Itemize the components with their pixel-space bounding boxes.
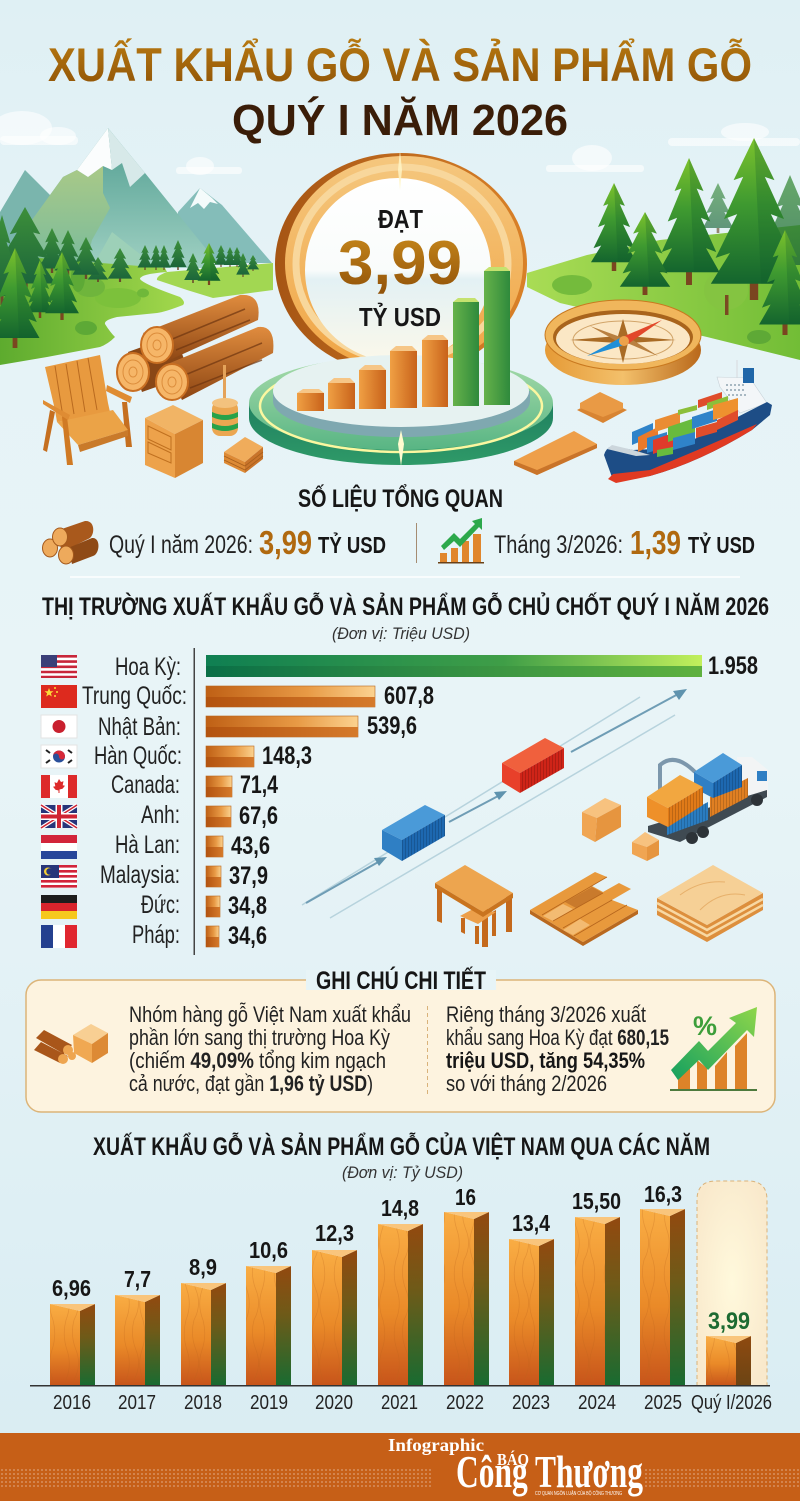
overview divider xyxy=(416,523,417,563)
row: Hàn Quốc: 148,3 xyxy=(262,742,312,770)
section heading: exports by year: (Đơn vị: Tỷ USD) xyxy=(342,1163,463,1182)
total value: 3,99 tỷ USD: 3,99 xyxy=(338,229,462,298)
bar: 2019: 2019 xyxy=(250,1392,288,1414)
total value: 3,99 tỷ USD xyxy=(338,204,462,332)
bar: 2016 xyxy=(50,1275,95,1414)
row: Pháp xyxy=(41,921,267,950)
log pile xyxy=(117,295,273,400)
section heading: key markets: (Đơn vị: Triệu USD) xyxy=(332,624,470,643)
bar: 2023: 2023 xyxy=(512,1392,550,1414)
row: Malaysia xyxy=(41,861,268,890)
footer logo xyxy=(388,1435,643,1497)
container ship xyxy=(604,360,772,483)
row: Đức: Đức: xyxy=(141,891,180,919)
row: Pháp: Pháp: xyxy=(132,921,180,949)
row: Trung Quốc xyxy=(41,682,434,710)
clouds xyxy=(0,111,800,175)
total value: 3,99 tỷ USD: TỶ USD xyxy=(359,302,441,332)
overview item: March: TỶ USD xyxy=(688,530,755,558)
text block: right note: so với tháng 2/2026 xyxy=(446,1071,607,1096)
bar: 2018: 8,9 xyxy=(189,1254,217,1280)
row: Hoa Kỳ: Hoa Kỳ: xyxy=(115,653,181,681)
bar: 2019: 10,6 xyxy=(249,1237,288,1263)
bar: 2022: 16 xyxy=(455,1184,476,1210)
row: Hàn Quốc xyxy=(41,742,312,770)
icon: logs and crate xyxy=(34,1024,108,1064)
footer logo: Công Thương xyxy=(456,1446,643,1497)
row: Pháp: 34,6 xyxy=(228,922,267,950)
central wooden ring xyxy=(275,150,527,375)
overview item: March: Tháng 3/2026: xyxy=(494,531,623,559)
row: Nhật Bản xyxy=(41,712,417,741)
footer logo: CƠ QUAN NGÔN LUẬN CỦA BỘ CÔNG THƯƠNG xyxy=(535,1490,622,1497)
overview item: quarter total: TỶ USD xyxy=(318,530,386,558)
pine forest, right xyxy=(591,138,800,335)
cardboard boxes xyxy=(582,798,659,861)
total value: 3,99 tỷ USD: ĐẠT xyxy=(378,204,423,234)
small planks xyxy=(577,392,627,423)
icon: percent growth arrow: % xyxy=(693,1011,717,1041)
text block: left note: (chiếm 49,09% tổng kim ngạch xyxy=(129,1048,386,1073)
bar: 2024: 15,50 xyxy=(572,1188,621,1214)
row: Đức: 34,8 xyxy=(228,892,267,920)
blue container xyxy=(382,805,445,861)
heading: notes: GHI CHÚ CHI TIẾT xyxy=(316,965,486,995)
row: Anh: 67,6 xyxy=(239,802,278,830)
overview item: March: 1,39 xyxy=(630,524,681,561)
bar: Quý I/2026: Quý I/2026 xyxy=(691,1392,772,1414)
bar: 2018 xyxy=(181,1254,226,1414)
text block: left note: phần lớn sang thị trường Hoa Kỳ xyxy=(129,1025,391,1050)
bar: 2025 xyxy=(640,1181,685,1414)
row: Đức xyxy=(41,891,267,920)
bar: 2025: 2025 xyxy=(644,1392,682,1414)
bar: 2016: 6,96 xyxy=(52,1275,91,1301)
compass xyxy=(545,300,701,385)
row: Anh: Anh: xyxy=(141,801,180,829)
bar: 2018: 2018 xyxy=(184,1392,222,1414)
bar: 2021: 2021 xyxy=(381,1392,418,1414)
title: QUÝ I NĂM 2026 xyxy=(232,95,568,145)
bar: 2017: 7,7 xyxy=(124,1266,151,1292)
row: Malaysia: Malaysia: xyxy=(100,861,180,889)
text block: right note: khẩu sang Hoa Kỳ đạt 680,15 xyxy=(446,1025,669,1050)
row: Nhật Bản: 539,6 xyxy=(367,712,417,740)
wooden spool xyxy=(212,365,238,436)
market list: flags, labels, bars and values xyxy=(41,652,758,950)
row: Canada: Canada: xyxy=(111,771,180,799)
row: Hà Lan: Hà Lan: xyxy=(115,831,180,859)
bar: 2019 xyxy=(246,1237,291,1414)
row: Hà Lan xyxy=(41,831,270,860)
row: Hoa Kỳ xyxy=(41,652,758,681)
text block: right note xyxy=(446,1002,669,1096)
text block: right note: triệu USD, tăng 54,35% xyxy=(446,1048,645,1073)
landscape: mountains, hills, river xyxy=(0,128,800,365)
footer band xyxy=(0,1433,800,1501)
section heading: exports by year xyxy=(93,1131,710,1182)
row: Canada xyxy=(41,771,278,799)
bar: Quý I/2026: 3,99 xyxy=(708,1308,750,1335)
bar: 2023 xyxy=(509,1210,554,1414)
bar: Quý I/2026 xyxy=(691,1308,772,1414)
bar: 2020 xyxy=(312,1220,357,1414)
bar: 2025: 16,3 xyxy=(644,1181,682,1207)
rising wooden bars xyxy=(297,267,510,411)
bar: 2017: 2017 xyxy=(118,1392,156,1414)
row: Malaysia: 37,9 xyxy=(229,862,268,890)
text block: left note: Nhóm hàng gỗ Việt Nam xuất khẩu xyxy=(129,1002,411,1027)
truck with containers xyxy=(647,753,768,844)
row: Anh xyxy=(41,801,278,830)
bar: 2020: 2020 xyxy=(315,1392,353,1414)
trade route arrows xyxy=(302,689,687,918)
text block: right note: Riêng tháng 3/2026 xuất xyxy=(446,1002,647,1027)
icon: growth chart xyxy=(438,518,484,564)
footer logo: BÁO xyxy=(497,1450,529,1469)
row: Hoa Kỳ: 1.958 xyxy=(708,652,758,680)
icon: percent growth arrow xyxy=(670,1007,757,1091)
bar: 2016: 2016 xyxy=(53,1392,91,1414)
bar: 2024: 2024 xyxy=(578,1392,616,1414)
row: Hà Lan: 43,6 xyxy=(231,832,270,860)
bar: 2017 xyxy=(115,1266,160,1414)
red container xyxy=(502,738,564,793)
footer logo: Infographic xyxy=(388,1435,484,1455)
text block: left note: cả nước, đạt gần 1,96 tỷ USD) xyxy=(129,1071,373,1096)
highlight: Q1 2026 column xyxy=(697,1181,767,1386)
section heading: overview: SỐ LIỆU TỔNG QUAN xyxy=(298,483,503,513)
bar: 2022 xyxy=(444,1184,489,1414)
pine forest, left xyxy=(0,207,259,348)
row: Nhật Bản: Nhật Bản: xyxy=(98,713,181,741)
bar: 2022: 2022 xyxy=(446,1392,484,1414)
glass platform xyxy=(249,355,553,466)
text block: left note xyxy=(129,1002,411,1096)
bar: 2021: 14,8 xyxy=(381,1195,419,1221)
overview item: March xyxy=(438,518,755,564)
bar: 2021 xyxy=(378,1195,423,1414)
bar: 2023: 13,4 xyxy=(512,1210,550,1236)
panel: detailed notes xyxy=(26,965,775,1112)
row: Trung Quốc: Trung Quốc: xyxy=(82,682,187,710)
column chart: exports by year xyxy=(30,1181,772,1414)
title xyxy=(48,38,752,145)
wood flooring xyxy=(530,872,638,946)
wooden cabinet xyxy=(145,405,203,478)
row: Canada: 71,4 xyxy=(240,771,278,799)
overview item: quarter total xyxy=(42,521,386,564)
wooden chair xyxy=(43,355,132,465)
long plank xyxy=(514,431,597,475)
row: Hàn Quốc: Hàn Quốc: xyxy=(94,742,182,770)
small plank stack xyxy=(224,437,263,473)
wooden table and stool xyxy=(435,865,513,947)
overview item: quarter total: Quý I năm 2026: xyxy=(109,531,253,559)
overview item: quarter total: 3,99 xyxy=(259,524,312,561)
row: Trung Quốc: 607,8 xyxy=(384,682,434,710)
bar: 2024 xyxy=(572,1188,621,1414)
icon: logs xyxy=(42,521,98,564)
bar: 2020: 12,3 xyxy=(315,1220,354,1246)
section heading: key markets xyxy=(42,591,769,643)
plywood stack xyxy=(657,865,763,942)
